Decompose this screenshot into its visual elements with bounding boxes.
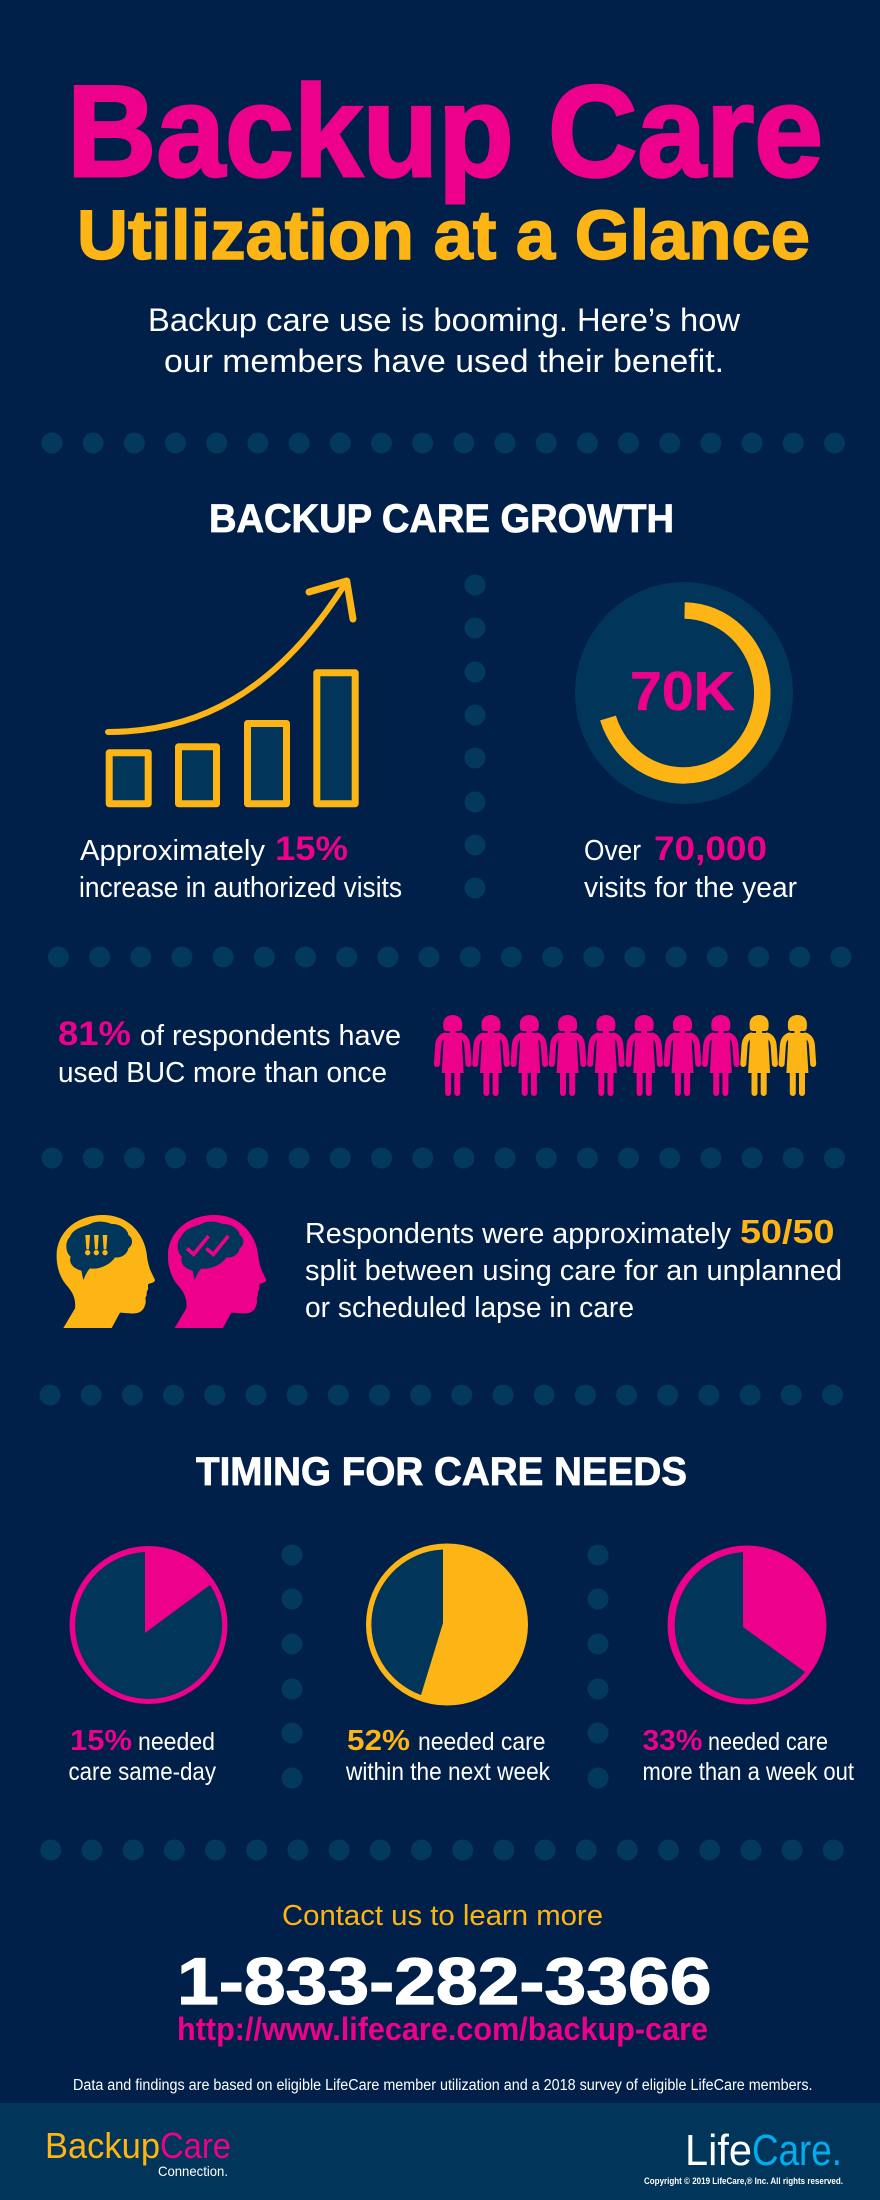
text: 50/50 split: Respondents were approximately xyxy=(305,1218,731,1250)
text: 52% next week: 52% xyxy=(347,1725,410,1757)
footer band xyxy=(0,2103,880,2200)
panel: growth bar chart with arrow xyxy=(108,581,355,804)
text: 52% next week: within the next week xyxy=(345,1758,550,1786)
text: over 70,000 xyxy=(584,830,797,904)
text: 15% increase: increase in authorized visits xyxy=(79,872,402,904)
contact label: Contact us to learn more xyxy=(282,1900,603,1932)
text: 15% same-day: 15% xyxy=(70,1725,132,1757)
text: 33% more than a week xyxy=(642,1725,854,1786)
donut chart: 70K: 70K xyxy=(630,660,735,722)
pie chart: 15% xyxy=(70,1546,228,1704)
intro text: Backup care use is booming. Here’s how xyxy=(148,302,741,338)
vertical dots divider xyxy=(282,1544,302,1788)
text: 52% next week xyxy=(345,1725,550,1786)
logo: BackupCare Connection: Care xyxy=(160,2125,231,2166)
pie chart: 33% xyxy=(668,1546,826,1704)
footnote: Data and findings are based on eligible LifeCare member utilization and a 2018 survey of eligible LifeCare members. xyxy=(73,2077,812,2094)
text: 33% more than a week: more than a week out xyxy=(642,1758,854,1786)
text: 81% of respondents xyxy=(58,1015,401,1089)
logo: BackupCare Connection: Connection. xyxy=(158,2163,228,2179)
text: 50/50 split xyxy=(305,1213,842,1324)
text: 15% increase: 15% xyxy=(275,830,348,868)
logo: LifeCare: Care. xyxy=(752,2126,842,2175)
text: over 70,000: visits for the year xyxy=(584,872,797,904)
text: 33% more than a week: needed care xyxy=(708,1728,828,1756)
text: 81% of respondents: used BUC more than once xyxy=(58,1057,387,1089)
text: 15% same-day: needed xyxy=(138,1728,215,1756)
subtitle: Utilization at a Glance xyxy=(77,196,810,274)
phone number: 1-833-282-3366 xyxy=(177,1944,712,2018)
url: http://www.lifecare.com/backup-care xyxy=(177,2011,708,2047)
text: 81% of respondents: of respondents have xyxy=(140,1020,401,1052)
text: 50/50 split: 50/50 xyxy=(740,1213,834,1250)
text: 15% same-day: care same-day xyxy=(68,1758,216,1786)
text: over 70,000: Over xyxy=(584,835,641,867)
text: over 70,000: 70,000 xyxy=(654,830,767,868)
text: 15% increase xyxy=(79,830,402,904)
logo: BackupCare Connection: Backup xyxy=(45,2125,160,2166)
heading: backup care growth: BACKUP CARE GROWTH xyxy=(209,497,674,541)
icon: head with check marks xyxy=(168,1215,266,1328)
vertical dots divider xyxy=(464,574,486,898)
arrow xyxy=(108,581,353,732)
intro text: our members have used their benefit. xyxy=(164,343,724,379)
donut chart: 70K xyxy=(575,582,793,804)
logo: BackupCare Connection xyxy=(45,2125,231,2179)
heading: timing for care needs: TIMING FOR CARE NEEDS xyxy=(196,1450,687,1494)
copyright: Copyright © 2019 LifeCare,® Inc. All rights reserved. xyxy=(644,2176,843,2187)
pie chart: 52% xyxy=(366,1544,528,1706)
title: Backup Care xyxy=(67,58,823,204)
icon row: ten people xyxy=(437,1015,813,1096)
text: 50/50 split: or scheduled lapse in care xyxy=(305,1292,634,1324)
text: 33% more than a week: 33% xyxy=(642,1725,703,1757)
text: 15% same-day xyxy=(68,1725,216,1786)
logo: LifeCare xyxy=(685,2126,842,2175)
logo: LifeCare: Life xyxy=(685,2126,752,2175)
text: 52% next week: needed care xyxy=(418,1728,546,1756)
vertical dots divider xyxy=(588,1544,608,1788)
intro text xyxy=(148,302,741,379)
text: 15% increase: Approximately xyxy=(80,835,265,867)
text: 50/50 split: split between using care for an unplanned xyxy=(305,1255,842,1287)
text: 81% of respondents: 81% xyxy=(58,1015,131,1053)
bar chart xyxy=(109,673,355,804)
icon: head with exclamation marks xyxy=(57,1215,155,1328)
